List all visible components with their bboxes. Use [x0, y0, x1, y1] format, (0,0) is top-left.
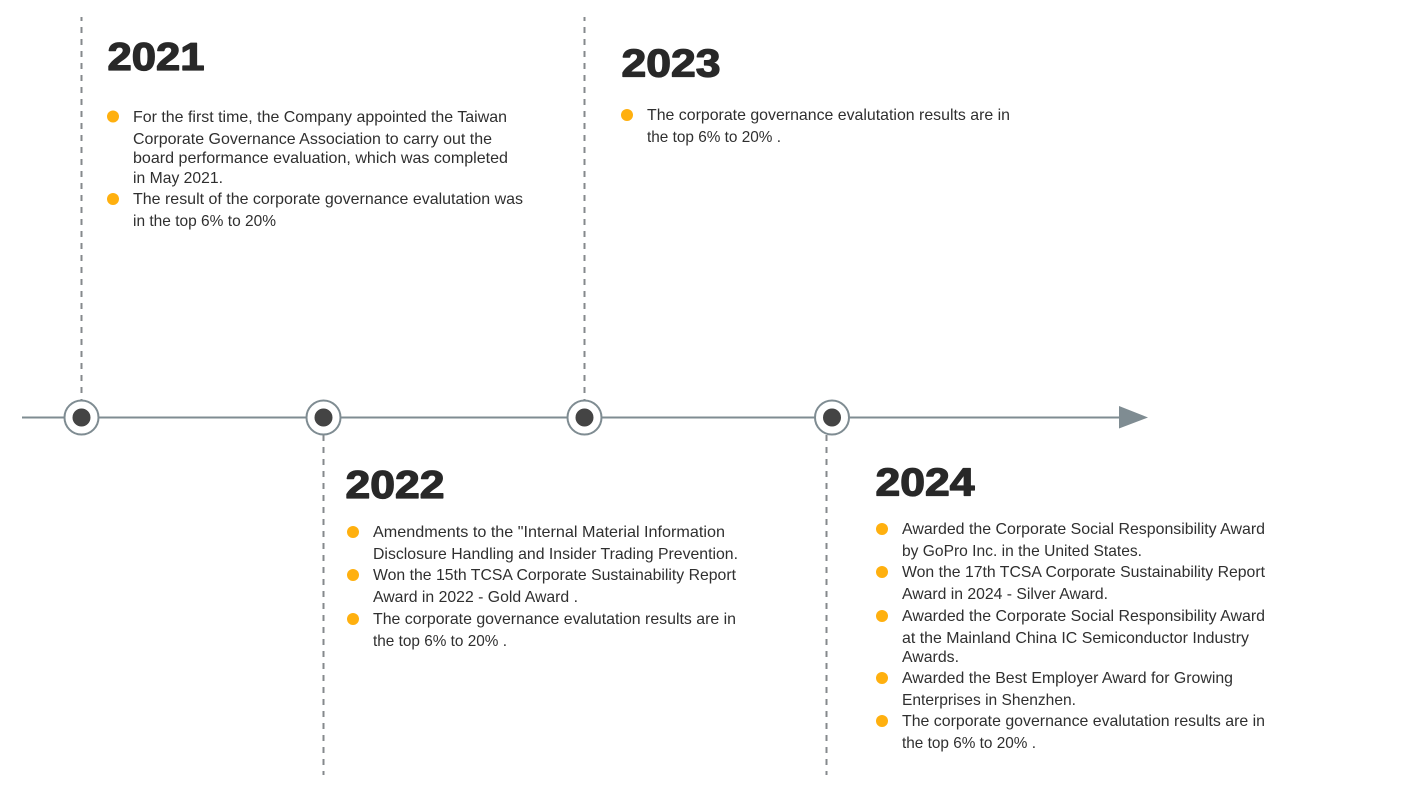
- list item: TCSA award: [876, 564, 1266, 603]
- list item: board evaluation: Corporate Governance Association to carry out the: [133, 131, 492, 148]
- list item: board evaluation: in May 2021.: [133, 170, 223, 187]
- heading: 2022: 2022: [346, 464, 444, 507]
- list item: TCSA award: Award in 2024 - Silver Award.: [902, 586, 1108, 603]
- connector: 2023: [584, 17, 586, 400]
- list item: amendments: [347, 524, 738, 563]
- list item: TCSA award: Won the 17th TCSA Corporate Sustainability Report: [902, 564, 1266, 581]
- list item: governance result: The result of the corporate governance evalutation was: [133, 191, 523, 208]
- timeline axis arrow: [22, 406, 1148, 428]
- list item: governance result: the top 6% to 20% .: [373, 633, 507, 650]
- list item: amendments: Amendments to the "Internal Material Information: [373, 524, 725, 541]
- list item: governance result: [107, 191, 523, 230]
- panel: 2024: [876, 462, 1266, 752]
- list item: IC industry award: [876, 608, 1265, 666]
- list item: governance result: [876, 713, 1265, 752]
- list item: GoPro award: Awarded the Corporate Social Responsibility Award: [902, 521, 1265, 538]
- list item: governance result: [347, 611, 736, 650]
- list item: IC industry award: Awarded the Corporate Social Responsibility Award: [902, 608, 1265, 625]
- list item: board evaluation: board performance evaluation, which was completed: [133, 150, 508, 167]
- list item: best employer award: Enterprises in Shenzhen.: [902, 692, 1076, 709]
- marker: 2024: [815, 400, 849, 434]
- list item: GoPro award: by GoPro Inc. in the United States.: [902, 543, 1142, 560]
- connector: 2022: [322, 435, 324, 775]
- list item: TCSA award: [347, 567, 737, 606]
- list item: IC industry award: at the Mainland China IC Semiconductor Industry: [902, 630, 1249, 647]
- list item: IC industry award: Awards.: [902, 649, 959, 666]
- list item: governance result: in the top 6% to 20%: [133, 213, 276, 230]
- panel: 2022: [346, 464, 738, 650]
- marker: 2021: [64, 400, 98, 434]
- list item: amendments: Disclosure Handling and Insider Trading Prevention.: [373, 546, 738, 563]
- list item: governance result: The corporate governance evalutation results are in: [902, 713, 1265, 730]
- list item: governance result: The corporate governance evalutation results are in: [373, 611, 736, 628]
- list item: board evaluation: [107, 109, 508, 187]
- list item: board evaluation: For the first time, the Company appointed the Taiwan: [133, 109, 507, 126]
- heading: 2024: 2024: [876, 462, 975, 505]
- list item: TCSA award: Award in 2022 - Gold Award .: [373, 589, 578, 606]
- list item: TCSA award: Won the 15th TCSA Corporate Sustainability Report: [373, 567, 737, 584]
- connector: 2021: [80, 17, 82, 400]
- connector: 2024: [826, 435, 828, 775]
- marker: 2022: [306, 400, 340, 434]
- panel: 2021: [107, 36, 523, 230]
- list item: governance result: the top 6% to 20% .: [902, 735, 1036, 752]
- list item: governance result: the top 6% to 20% .: [647, 129, 781, 146]
- heading: 2023: 2023: [622, 42, 720, 86]
- list item: GoPro award: [876, 521, 1265, 560]
- list item: governance result: [621, 107, 1010, 146]
- list item: best employer award: [876, 670, 1233, 709]
- panel: 2023: [621, 42, 1010, 146]
- marker: 2023: [568, 400, 602, 434]
- list item: best employer award: Awarded the Best Employer Award for Growing: [902, 670, 1233, 687]
- heading: 2021: 2021: [108, 36, 204, 79]
- list item: governance result: The corporate governance evalutation results are in: [647, 107, 1010, 124]
